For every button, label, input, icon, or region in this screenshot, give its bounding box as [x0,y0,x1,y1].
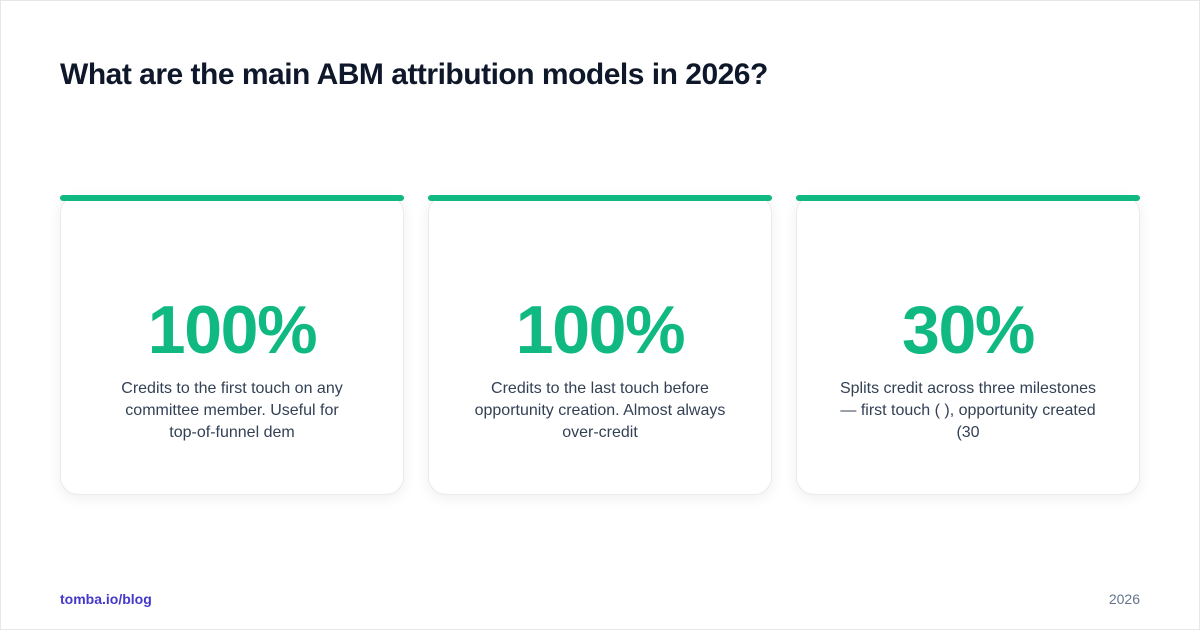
panel: milestone split card [796,195,1140,498]
panel: last touch card [428,195,772,498]
text: first touch description: Credits to the first touch on any [121,380,343,397]
text: first touch description: committee member. Useful for [125,402,339,419]
text: milestone description: (30 [956,424,980,441]
text: first touch description [121,380,343,441]
text: milestone description: Splits credit across three milestones [840,380,1096,397]
text: last touch description [475,380,725,441]
text: milestone description [840,380,1096,441]
text: last touch description: Credits to the last touch before [491,380,709,397]
text: last touch description: over-credit [562,424,638,441]
footer year: 2026 [1109,591,1140,607]
panel: first touch card [60,195,404,498]
text: first touch description: top-of-funnel dem [169,424,295,441]
text: last touch description: opportunity creation. Almost always [475,402,725,419]
title: What are the main ABM attribution models in 2026? [60,58,768,91]
footer brand link: tomba.io/blog [60,591,152,607]
stat: first touch percentage: 100% [148,292,316,368]
stat: last touch percentage: 100% [516,292,684,368]
stat: milestone percentage: 30% [902,292,1034,368]
text: milestone description: — first touch ( ), opportunity created [840,402,1096,419]
